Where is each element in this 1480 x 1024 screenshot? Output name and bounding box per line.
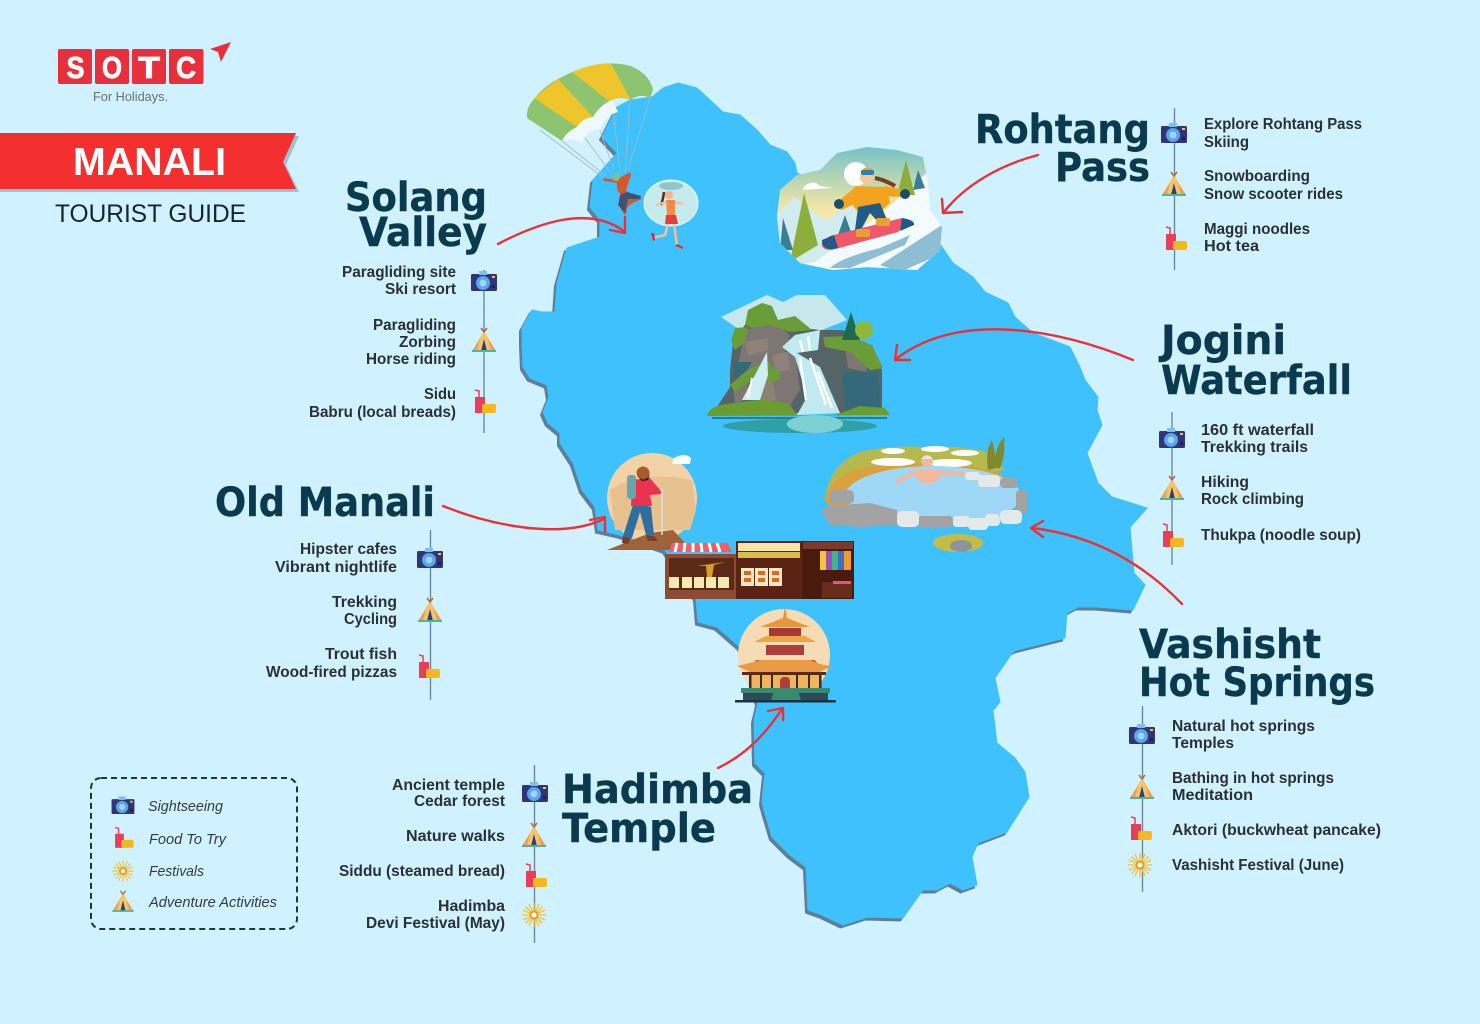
heading: Vashisht Hot Springs: Hot Springs (1139, 660, 1375, 706)
list: Vashisht Hot Springs (1128, 706, 1381, 892)
legend: Sightseeing (148, 798, 224, 815)
list: Old Manali: Trekking (332, 594, 397, 611)
list: Solang Valley: Ski resort (385, 281, 456, 298)
illustration: Hadimba temple (735, 606, 836, 702)
list: Hadimba Temple: Devi Festival (May) (366, 915, 505, 932)
illustration: waterfall (707, 295, 890, 433)
heading: Rohtang Pass: Rohtang (975, 107, 1150, 153)
list: Solang Valley (309, 264, 497, 433)
list: Hadimba Temple: Cedar forest (414, 793, 505, 810)
list: Hadimba Temple: Ancient temple (392, 777, 505, 794)
list: Rohtang Pass: Snow scooter rides (1204, 186, 1343, 203)
logo: SOTC: C (176, 50, 196, 85)
heading: Rohtang Pass: Pass (1055, 145, 1150, 191)
title banner: MANALI (73, 141, 226, 184)
list: Rohtang Pass: Skiing (1204, 134, 1249, 151)
list: Vashisht Hot Springs: Natural hot springs (1172, 718, 1315, 735)
list: Hadimba Temple: Siddu (steamed bread) (339, 863, 505, 880)
heading: Jogini Waterfall (1158, 318, 1352, 404)
arrow: Hadimba Temple (718, 708, 783, 768)
list: Jogini Waterfall: 160 ft waterfall (1201, 422, 1314, 439)
logo: SOTC: S (66, 50, 84, 85)
list: Hadimba Temple: Nature walks (406, 828, 505, 845)
list: Vashisht Hot Springs: Meditation (1172, 787, 1253, 804)
list: Rohtang Pass (1161, 108, 1362, 270)
subtitle: TOURIST GUIDE (55, 200, 246, 228)
list: Jogini Waterfall: Hiking (1201, 474, 1249, 491)
heading: Solang Valley: Valley (359, 210, 487, 256)
heading: Vashisht Hot Springs (1139, 622, 1375, 706)
arrow: Solang Valley (498, 217, 625, 244)
list: Jogini Waterfall: Trekking trails (1201, 439, 1308, 456)
illustration: market stalls (665, 541, 854, 599)
legend: Adventure Activities (148, 894, 277, 911)
title banner (0, 133, 299, 192)
arrow: Vashisht Hot Springs (1031, 521, 1182, 604)
arrow: Jogini Waterfall (895, 329, 1133, 360)
list: Vashisht Hot Springs: Bathing in hot springs (1172, 770, 1334, 787)
illustration: zorbing girl (644, 180, 698, 249)
list: Vashisht Hot Springs: Vashisht Festival (June) (1172, 857, 1344, 874)
logo: SOTC (58, 42, 231, 104)
heading: Old Manali: Old Manali (215, 480, 435, 526)
list: Hadimba Temple (339, 765, 548, 943)
arrow: Old Manali (443, 506, 605, 532)
list: Old Manali: Hipster cafes (300, 541, 397, 558)
illustration: hiker (607, 453, 697, 550)
legend (91, 778, 297, 929)
list: Jogini Waterfall: Rock climbing (1201, 491, 1304, 508)
list: Old Manali: Wood-fired pizzas (266, 664, 397, 681)
heading: Solang Valley: Solang (345, 175, 487, 221)
list: Old Manali (266, 530, 443, 700)
illustration: snowboarder (777, 147, 942, 270)
list: Solang Valley: Zorbing (399, 334, 456, 351)
list: Vashisht Hot Springs: Aktori (buckwheat pancake) (1172, 822, 1381, 839)
list: Old Manali: Vibrant nightlife (275, 559, 397, 576)
list: Solang Valley: Horse riding (366, 351, 456, 368)
legend: Festivals (149, 863, 204, 880)
list: Vashisht Hot Springs: Temples (1172, 735, 1234, 752)
map of Manali region (520, 83, 1147, 928)
heading: Vashisht Hot Springs: Vashisht (1139, 622, 1321, 668)
list: Hadimba Temple: Hadimba (438, 898, 505, 915)
legend: Food To Try (149, 831, 227, 848)
list: Rohtang Pass: Hot tea (1204, 238, 1259, 255)
list: Solang Valley: Paragliding site (342, 264, 456, 281)
heading: Solang Valley (345, 175, 487, 256)
list: Old Manali: Trout fish (325, 646, 397, 663)
logo: SOTC: T (138, 50, 160, 85)
arrow: Rohtang Pass (942, 155, 1038, 213)
list: Solang Valley: Sidu (424, 386, 456, 403)
list: Solang Valley: Paragliding (373, 317, 456, 334)
list: Jogini Waterfall (1159, 412, 1361, 565)
heading: Rohtang Pass (975, 107, 1150, 191)
list: Old Manali: Cycling (344, 611, 397, 628)
list: Rohtang Pass: Maggi noodles (1204, 221, 1310, 238)
list: Jogini Waterfall: Thukpa (noodle soup) (1201, 527, 1361, 544)
heading: Jogini Waterfall: Waterfall (1161, 358, 1352, 404)
heading: Hadimba Temple: Hadimba (562, 767, 753, 813)
heading: Jogini Waterfall: Jogini (1158, 318, 1286, 364)
list: Solang Valley: Babru (local breads) (309, 404, 456, 421)
heading: Hadimba Temple (562, 767, 753, 852)
heading: Hadimba Temple: Temple (562, 806, 716, 852)
illustration: hot spring (822, 437, 1027, 552)
list: Rohtang Pass: Explore Rohtang Pass (1204, 116, 1362, 133)
logo: SOTC: O (102, 50, 122, 85)
logo: SOTC: For Holidays. (93, 90, 168, 104)
illustration: paraglider (526, 63, 653, 215)
list: Rohtang Pass: Snowboarding (1204, 168, 1310, 185)
